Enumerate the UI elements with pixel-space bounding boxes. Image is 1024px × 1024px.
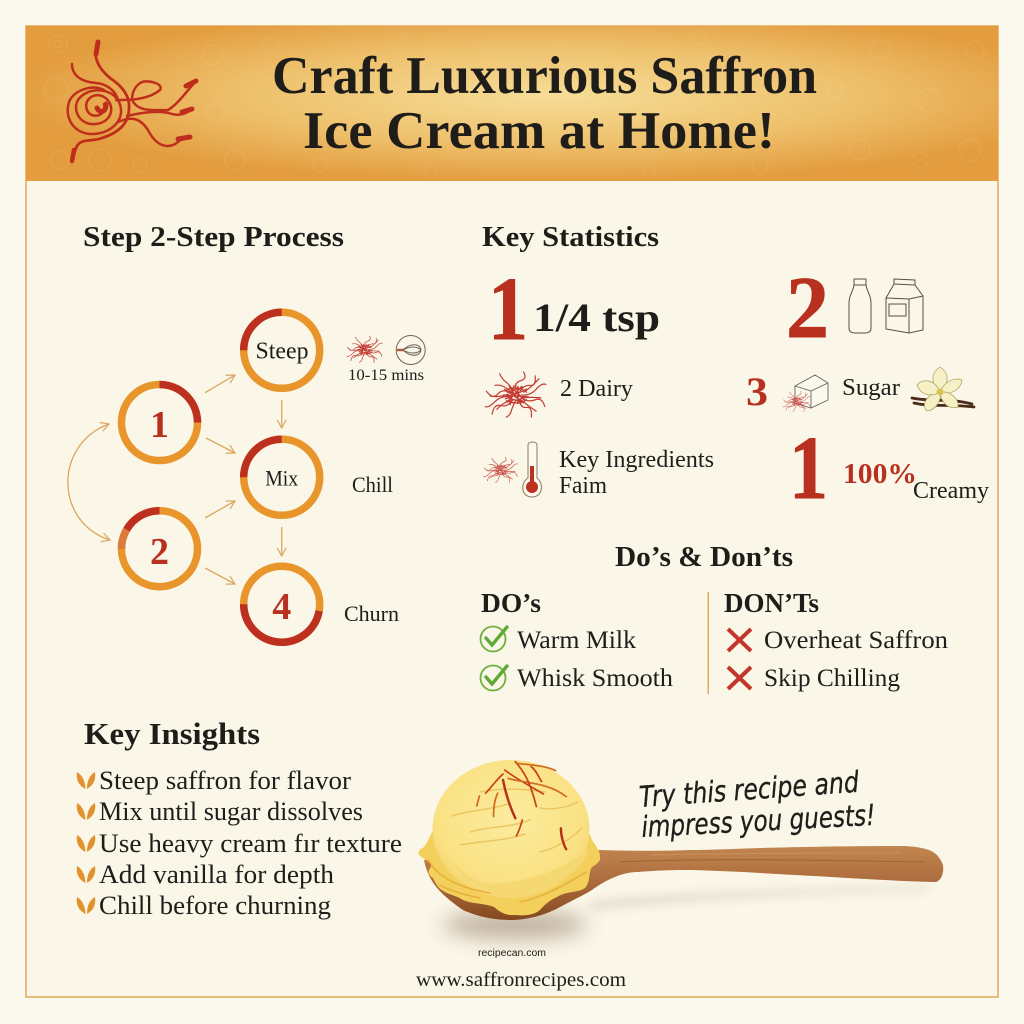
icon: check (480, 666, 507, 690)
stat: 1 1/4 tsp: 1 (488, 260, 528, 359)
stat: 1 1/4 tsp (488, 260, 660, 359)
label: key ingredients faim: Faim (559, 473, 607, 499)
item: Use heavy cream fır texture (99, 829, 402, 858)
title: Ice Cream at Home! (303, 102, 775, 160)
stat: 1 creamy: 100% (843, 458, 917, 490)
panel: don'ts (724, 588, 949, 692)
label: overheat saffron: Overheat Saffron (764, 627, 949, 654)
ring: mix (244, 439, 320, 515)
ring: step 2 (122, 511, 198, 587)
title: Craft Luxurious Saffron (272, 47, 817, 105)
arrow: 2 to mix (205, 501, 235, 518)
panel: key insights list (77, 766, 402, 920)
divider (708, 592, 709, 694)
arrow: 1 to steep (205, 375, 235, 393)
panel: do's (480, 588, 674, 692)
icon: milk carton (886, 279, 923, 333)
icon: milk bottle (849, 279, 871, 333)
icon: whisk (396, 336, 425, 364)
bullet (77, 772, 95, 789)
icon: sugar cube (795, 375, 828, 408)
ring: step 1: 1 (150, 404, 169, 446)
icon: saffron swirl logo (68, 42, 196, 161)
ring: step 4: 4 (272, 586, 291, 628)
icon: thermometer (523, 442, 541, 497)
bullet (77, 897, 95, 914)
icon: saffron threads (485, 372, 546, 417)
label: 2 dairy: 2 Dairy (560, 376, 633, 402)
bullet (77, 835, 95, 852)
label: key ingredients faim: Key Ingredients (559, 447, 714, 473)
icon: cross (728, 667, 751, 689)
ring: steep (244, 312, 320, 388)
saffron threads on scoop (477, 762, 566, 849)
item: Mix until sugar dissolves (99, 797, 363, 826)
ring: step 4 (244, 566, 320, 642)
stat: 1 creamy (789, 419, 989, 518)
stat: 1 creamy: Creamy (913, 478, 989, 504)
arrow: mix to 4 (281, 527, 283, 556)
arrow: loop between 1 and 2 (68, 424, 110, 540)
label: skip chilling: Skip Chilling (764, 665, 901, 692)
ring: steep: Steep (256, 338, 308, 364)
icon: saffron pile (783, 391, 811, 412)
heading: step process: Step 2-Step Process (83, 222, 344, 253)
caption: image credit: recipecan.com (478, 948, 546, 959)
arrow: steep to mix (281, 400, 283, 428)
panel: header banner (26, 26, 998, 181)
footer: website: www.saffronrecipes.com (416, 969, 626, 991)
stat: 1 creamy: 1 (789, 419, 828, 518)
stat: 3: 3 (746, 369, 768, 414)
heading: do's and don'ts: Do’s & Don’ts (615, 542, 793, 573)
item: Steep saffron for flavor (99, 766, 351, 795)
icon: cross (728, 629, 751, 651)
stat: 1 1/4 tsp: 1/4 tsp (533, 295, 660, 340)
ring: step 1 (122, 384, 198, 460)
label: time: 10-15 mins (348, 367, 424, 384)
heading: do's: DO’s (481, 588, 541, 618)
heading: key insights: Key Insights (84, 716, 260, 751)
arrow: 1 to mix (206, 438, 235, 453)
icon: check (480, 626, 507, 652)
callout: handwritten note (638, 765, 876, 844)
bullet (77, 866, 95, 883)
ring: step 2: 2 (150, 531, 169, 573)
icon: saffron threads faint (484, 457, 518, 482)
title (272, 47, 817, 160)
item: Add vanilla for depth (99, 860, 334, 889)
label: chill: Chill (352, 472, 393, 497)
bullet (77, 803, 95, 820)
panel: key statistics (484, 260, 989, 518)
panel: process diagram (68, 312, 425, 642)
item: Chill before churning (99, 891, 331, 920)
illustration: ice cream scoop on wooden spoon (418, 760, 943, 939)
stat: 2: 2 (786, 260, 829, 357)
label: sugar: Sugar (842, 375, 900, 401)
label: churn: Churn (344, 601, 399, 626)
label: warm milk: Warm Milk (517, 627, 637, 654)
heading: don'ts: DON’Ts (724, 588, 819, 618)
label: key ingredients faim (559, 447, 714, 499)
arrow: 2 to 4 (205, 568, 235, 584)
label: whisk smooth: Whisk Smooth (517, 665, 674, 692)
icon: saffron threads small (347, 336, 382, 362)
ring: mix: Mix (265, 466, 298, 490)
icon: vanilla flower (912, 367, 974, 411)
callout: handwritten note: impress you guests! (641, 798, 876, 844)
callout: handwritten note: Try this recipe and (638, 765, 860, 814)
heading: key statistics: Key Statistics (482, 222, 659, 253)
